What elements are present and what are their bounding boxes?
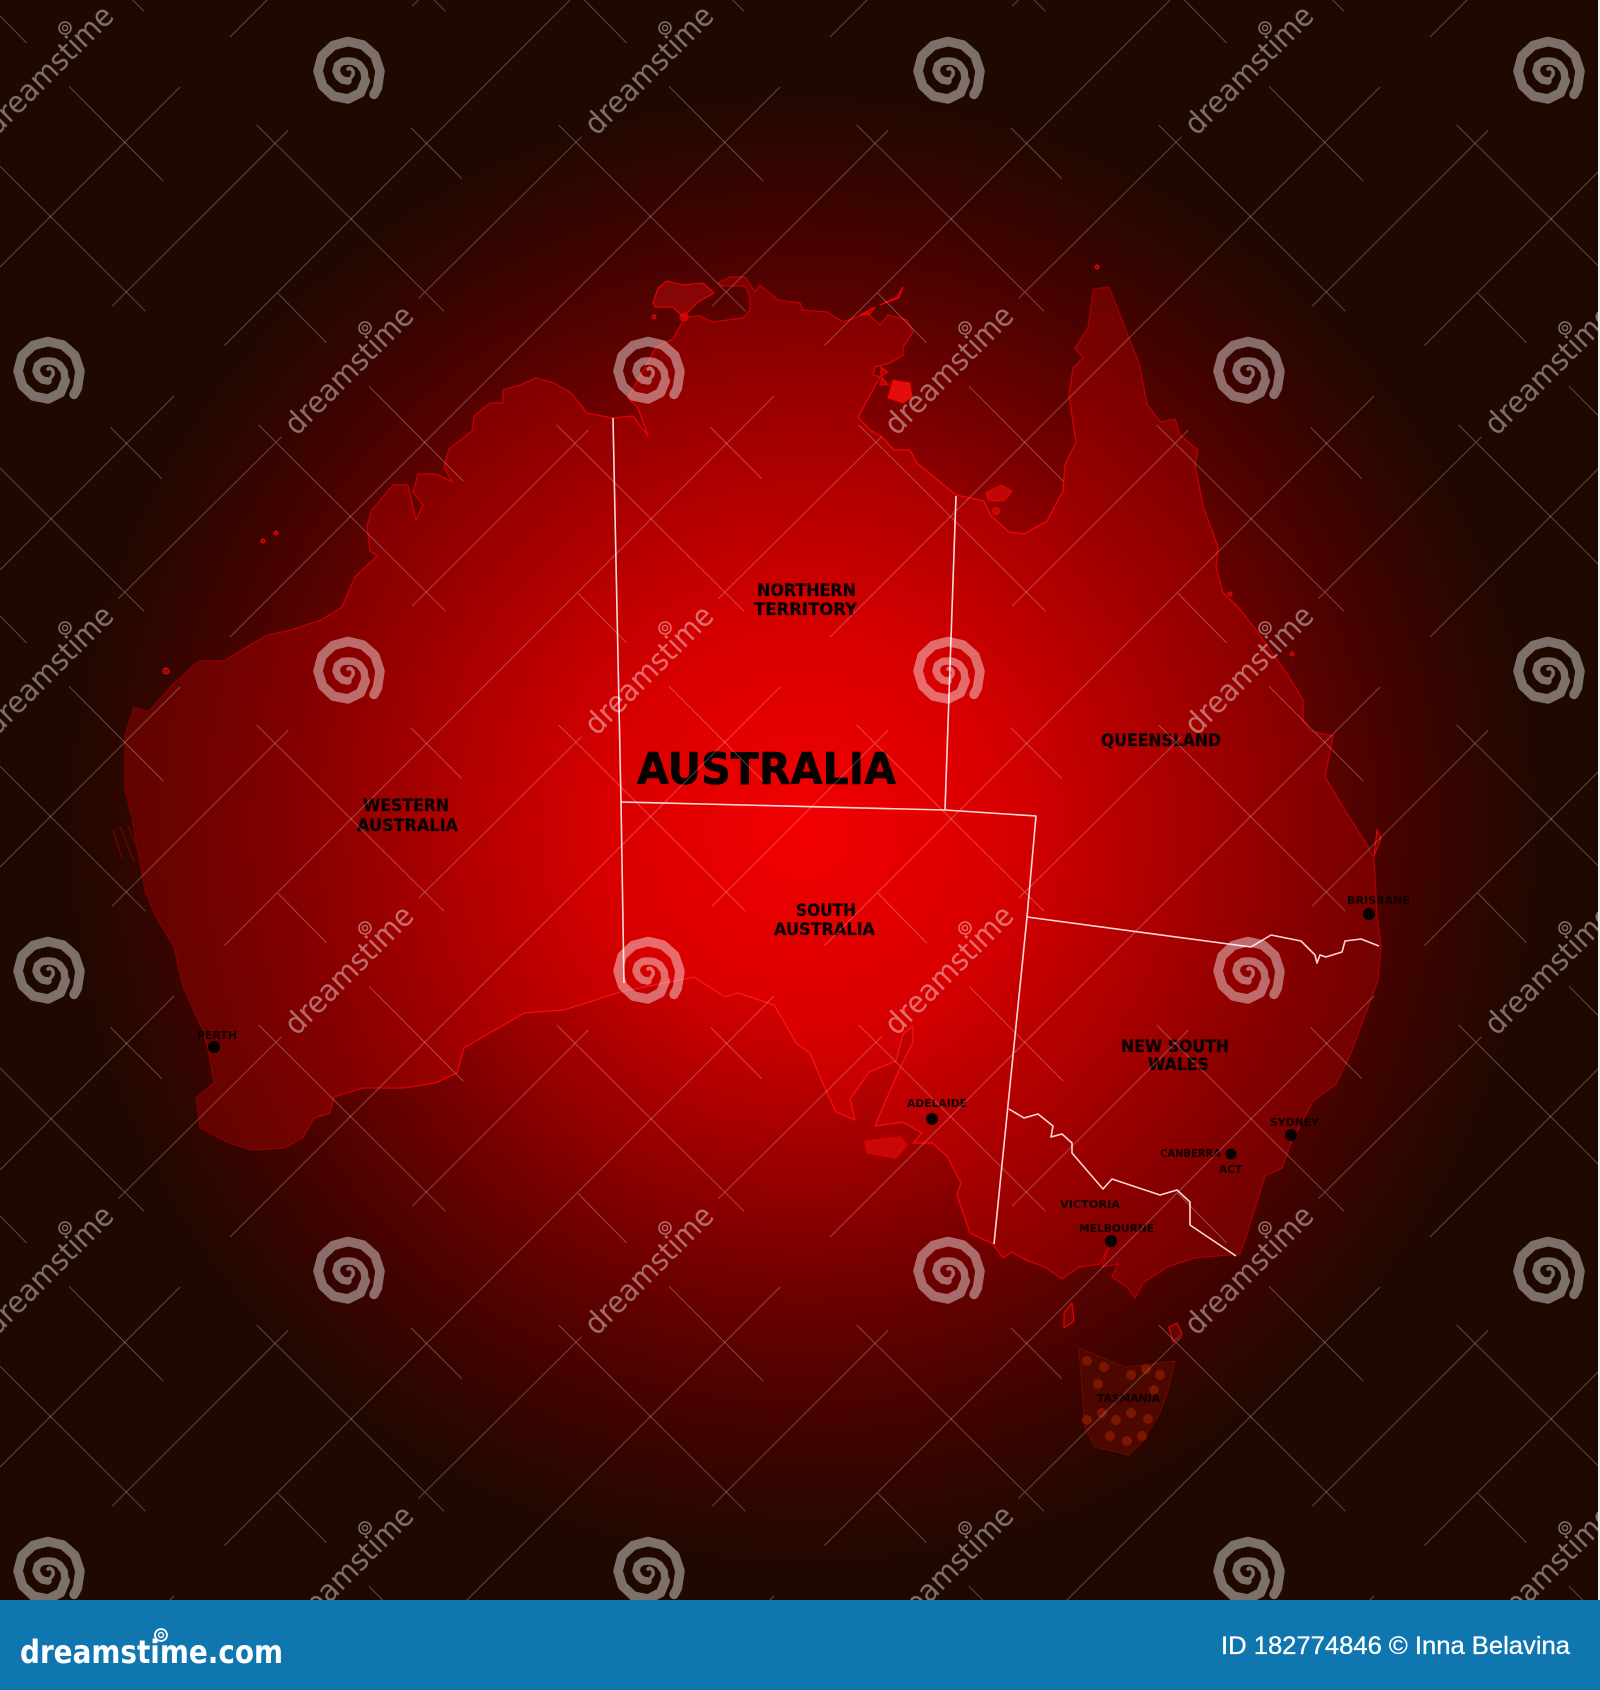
Shark Bay detail	[113, 826, 150, 862]
label: Brisbane: BRISBANE	[1347, 894, 1410, 907]
label: South Australia: AUSTRALIA	[774, 920, 875, 939]
label: South Australia	[774, 901, 875, 939]
label: New South Wales: WALES	[1148, 1055, 1209, 1074]
label: Victoria: VICTORIA	[1060, 1198, 1120, 1211]
label: Tasmania: TASMANIA	[1097, 1392, 1160, 1405]
label: Northern Territory	[754, 581, 858, 619]
watermark overlay: dreamstime	[878, 1499, 1021, 1642]
Tasmania with dot pattern	[1079, 1348, 1175, 1455]
watermark overlay: dreamstime	[1178, 1199, 1321, 1342]
watermark overlay: dreamstime	[578, 599, 721, 742]
label: South Australia: SOUTH	[796, 901, 856, 920]
watermark overlay: dreamstime	[1178, 599, 1321, 742]
label: Perth: PERTH	[197, 1029, 237, 1042]
label: New South Wales: NEW SOUTH	[1121, 1037, 1229, 1056]
state labels	[357, 581, 1242, 1405]
label: Western Australia: AUSTRALIA	[357, 816, 458, 835]
watermark overlay: dreamstime	[878, 899, 1021, 1042]
state borders	[613, 418, 1379, 1256]
label: Western Australia: WESTERN	[363, 796, 449, 815]
label: Melbourne: MELBOURNE	[1079, 1222, 1154, 1235]
watermark overlay: dreamstime	[278, 899, 421, 1042]
islands	[163, 265, 1381, 1342]
city labels	[197, 894, 1410, 1235]
label: New South Wales	[1121, 1037, 1229, 1074]
label: Queensland: QUEENSLAND	[1101, 731, 1221, 750]
city markers	[208, 908, 1375, 1247]
label: Western Australia	[357, 796, 458, 835]
map of Australia	[113, 265, 1381, 1455]
watermark overlay: dreamstime	[278, 1499, 421, 1642]
watermark overlay: dreamstime	[878, 299, 1021, 442]
label: Sydney: SYDNEY	[1270, 1116, 1320, 1129]
image credit: ID 182774846 © Inna Belavina	[1221, 1632, 1570, 1660]
mainland outline	[125, 277, 1381, 1298]
label: Northern Territory: TERRITORY	[754, 600, 858, 619]
label: ACT: ACT	[1219, 1163, 1242, 1176]
title: AUSTRALIA: AUSTRALIA	[637, 744, 896, 795]
watermark overlay: dreamstime	[278, 299, 421, 442]
label: Northern Territory: NORTHERN	[757, 581, 856, 600]
watermark overlay: dreamstime	[578, 1199, 721, 1342]
label: Adelaide: ADELAIDE	[907, 1097, 967, 1110]
footer banner	[0, 1600, 1600, 1690]
label: Canberra: CANBERRA	[1160, 1147, 1221, 1160]
logo: dreamstime.com: dreamstime.com	[20, 1633, 283, 1671]
